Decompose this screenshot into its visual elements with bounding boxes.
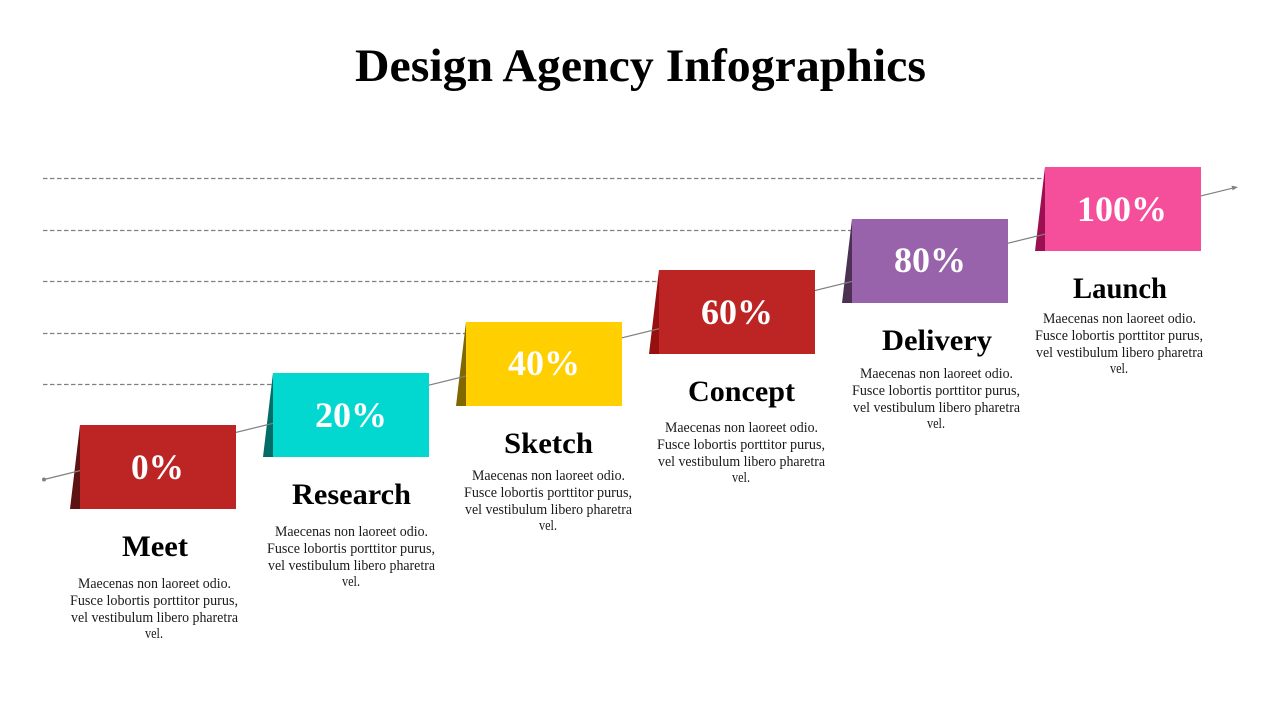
title: Design Agency Infographics [355,40,926,92]
step: Delivery 80%: 80% [894,240,966,280]
step: Delivery 80%: Fusce lobortis porttitor purus, [852,383,1020,399]
step: Sketch 40%: vel. [539,518,557,534]
step: Research 20%: Fusce lobortis porttitor purus, [267,541,435,557]
step: Research 20%: 20% [315,395,387,435]
side faces of the step boxes [70,167,1045,509]
dashed guide lines [43,178,1045,384]
step: Research 20%: vel. [342,574,360,590]
step: Sketch 40%: Fusce lobortis porttitor purus, [464,485,632,501]
step: Research 20% [267,373,436,590]
step: Sketch 40%: Sketch [504,427,593,460]
step: Concept 60%: Concept [688,375,795,408]
step: Concept 60%: vel. [732,470,750,486]
step: Sketch 40%: vel vestibulum libero pharetra [465,502,633,518]
step: Concept 60%: Maecenas non laoreet odio. [665,420,818,436]
step: Delivery 80%: vel vestibulum libero pharetra [853,400,1021,416]
step: Meet 0% [70,425,239,642]
step: Sketch 40%: 40% [508,343,580,383]
step: Meet 0%: Fusce lobortis porttitor purus, [70,593,238,609]
step: Research 20%: vel vestibulum libero pharetra [268,558,436,574]
step: Delivery 80% [852,219,1021,432]
step: Launch 100%: vel. [1110,361,1128,377]
step: Launch 100%: Launch [1073,272,1167,305]
step: Concept 60%: Fusce lobortis porttitor purus, [657,437,825,453]
step: Meet 0%: Maecenas non laoreet odio. [78,576,231,592]
step: Delivery 80%: Maecenas non laoreet odio. [860,366,1013,382]
step: Launch 100%: vel vestibulum libero pharetra [1036,345,1204,361]
step: Concept 60%: vel vestibulum libero pharetra [658,454,826,470]
growth arrow [42,186,1238,482]
step: Meet 0%: vel. [145,626,163,642]
step: Research 20%: Maecenas non laoreet odio. [275,524,428,540]
step: Sketch 40%: Maecenas non laoreet odio. [472,468,625,484]
step: Launch 100% [1035,167,1204,377]
step: Launch 100%: Maecenas non laoreet odio. [1043,311,1196,327]
step: Launch 100%: Fusce lobortis porttitor purus, [1035,328,1203,344]
step: Delivery 80%: vel. [927,416,945,432]
step: Launch 100%: 100% [1077,189,1167,229]
step: Research 20%: Research [292,478,411,511]
step: Concept 60%: 60% [701,292,773,332]
step: Delivery 80%: Delivery [882,324,992,357]
step: Meet 0%: vel vestibulum libero pharetra [71,610,239,626]
step: Meet 0%: Meet [122,530,188,563]
step: Meet 0%: 0% [131,447,184,487]
step: Concept 60% [657,270,826,486]
step: Sketch 40% [464,322,633,534]
